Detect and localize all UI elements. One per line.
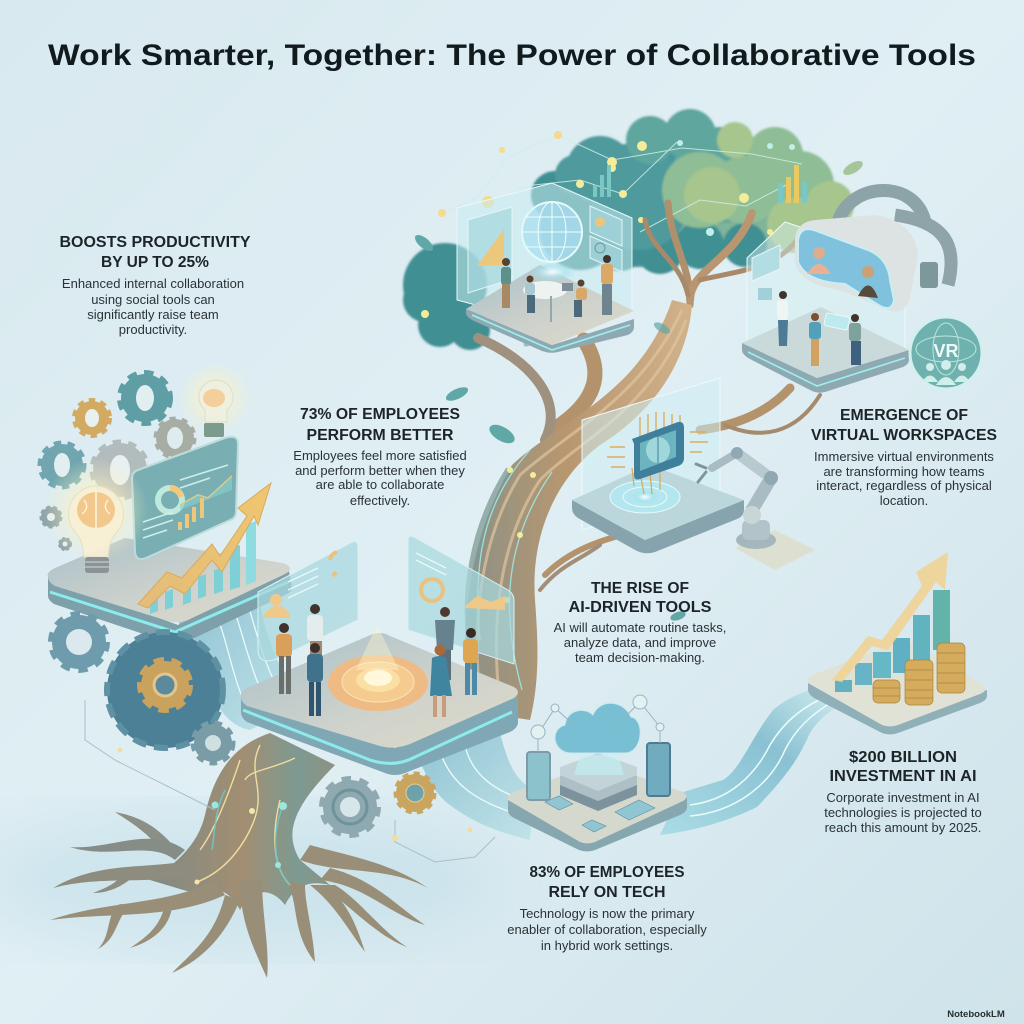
panel: cloud and devices platform: [508, 695, 687, 852]
people: [501, 255, 613, 317]
icon: VR badge: VR: [933, 341, 959, 361]
root detail lines: [197, 745, 295, 885]
gear: left teal: [41, 444, 83, 486]
roots and lower trunk: [50, 733, 428, 978]
gear: gray root: [323, 780, 377, 834]
text: boosts productivity: using social tools can: [91, 292, 215, 307]
text: emergence of virtual workspaces: are transforming how teams: [823, 464, 985, 479]
gears under slab: [52, 615, 232, 762]
side panel: [590, 206, 622, 272]
gear: small: [41, 507, 61, 527]
hologram panel right: [408, 536, 514, 664]
glass backdrop: [457, 183, 632, 325]
text: $200 billion investment: technologies is projected to: [824, 805, 982, 820]
panel: investment platform with coins: [808, 552, 987, 734]
text: $200 billion investment: Corporate investment in AI: [826, 790, 980, 805]
circuit lines: [85, 700, 495, 862]
growth arrow: [832, 552, 948, 682]
text: emergence of virtual workspaces: EMERGENCE OF: [840, 407, 968, 424]
text: emergence of virtual workspaces: Immersive virtual environments: [814, 449, 994, 464]
text: rise of AI-driven tools: AI-DRIVEN TOOLS: [568, 599, 712, 616]
person 3: [307, 643, 323, 716]
gear: gray large: [93, 443, 147, 497]
text: boosts productivity: [60, 234, 251, 337]
icon: large brain bulb: [44, 458, 148, 573]
AI chip: [607, 412, 708, 494]
text: 83% rely on tech: RELY ON TECH: [548, 884, 666, 901]
text: 83% rely on tech: 83% OF EMPLOYEES: [530, 864, 684, 881]
platform slab: [466, 265, 634, 353]
platform: virtual workspace: [742, 190, 982, 393]
glow disc: [328, 625, 428, 711]
text: 73% of employees: are able to collaborate: [316, 477, 444, 492]
panel: left gears and ideas cluster: [41, 362, 292, 644]
people: [777, 291, 861, 366]
text: 73% of employees: and perform better when they: [295, 463, 465, 478]
text: boosts productivity: Enhanced internal collaboration: [62, 276, 244, 291]
cloud links: [538, 702, 660, 752]
person 2: [307, 604, 323, 671]
VR headset: [795, 190, 951, 312]
person 4: [435, 607, 455, 680]
text: 73% of employees: Employees feel more satisfied: [293, 448, 467, 463]
glass wall: [747, 222, 905, 375]
gear: small lower: [194, 724, 232, 762]
text: $200 billion investment: [824, 749, 982, 835]
tree trunk and branches: [465, 203, 820, 720]
flowing data ribbon: [179, 590, 845, 840]
platform: AI chip and robot arm: [572, 378, 815, 570]
gear: blue left: [52, 615, 106, 669]
person 5: [430, 644, 452, 717]
text: rise of AI-driven tools: [554, 580, 726, 665]
text: 73% of employees: effectively.: [350, 493, 410, 508]
tree canopy: [403, 109, 854, 350]
text: rise of AI-driven tools: AI will automate routine tasks,: [554, 620, 726, 635]
gear: gold: [75, 401, 109, 435]
server stack: [560, 753, 637, 811]
person 6: [463, 628, 478, 695]
wall panel: [752, 245, 780, 300]
text: 73% of employees: PERFORM BETTER: [306, 427, 454, 444]
bar chart: [150, 521, 256, 614]
text: boosts productivity: productivity.: [119, 322, 187, 337]
ribbon to investment: [660, 688, 845, 835]
watermark: NotebookLM: [947, 1009, 1005, 1020]
ribbon to cloud: [413, 722, 535, 840]
platform slab: [241, 633, 518, 775]
platform slab: [572, 465, 744, 553]
text: boosts productivity: BOOSTS PRODUCTIVITY: [60, 234, 251, 251]
text: emergence of virtual workspaces: VIRTUAL WORKSPACES: [811, 427, 997, 444]
panel: central team platform: [241, 536, 518, 775]
text: boosts productivity: significantly raise team: [87, 307, 219, 322]
gear: tan: [156, 419, 194, 457]
hologram panel left: [258, 542, 358, 661]
floating leaves: [412, 158, 865, 622]
text: rise of AI-driven tools: analyze data, and improve: [564, 635, 716, 650]
platform slab: [742, 307, 909, 393]
text: rise of AI-driven tools: THE RISE OF: [591, 580, 689, 597]
gear: top teal: [121, 374, 169, 422]
globe: [522, 202, 582, 282]
dashboard screen: [132, 437, 238, 559]
text: $200 billion investment: INVESTMENT IN AI: [830, 768, 976, 785]
phone: [647, 743, 670, 796]
tablet: [527, 752, 550, 800]
platform: team meeting with globe: [457, 183, 634, 353]
coin stacks: [873, 643, 965, 705]
root fingers: [50, 812, 428, 978]
table: [523, 281, 567, 322]
text: 83% rely on tech: [507, 864, 707, 953]
text: rise of AI-driven tools: team decision-making.: [575, 650, 705, 665]
bar chart: [835, 590, 950, 692]
gear: tiny: [59, 538, 71, 550]
canopy network lines and nodes: [440, 135, 802, 232]
gear: big dark: [107, 632, 223, 748]
text: 73% of employees: 73% OF EMPLOYEES: [300, 406, 460, 423]
chart panel: [468, 207, 512, 293]
text: 73% of employees: [293, 406, 467, 508]
text: 83% rely on tech: enabler of collaboration, especially: [507, 922, 707, 937]
text: emergence of virtual workspaces: [811, 407, 997, 508]
text: boosts productivity: BY UP TO 25%: [101, 254, 209, 271]
canopy mini bar chart: [593, 165, 807, 203]
title: Work Smarter, Together: The Power of Collaborative Tools: [48, 39, 976, 72]
glass panels: [582, 378, 720, 530]
text: emergence of virtual workspaces: interact, regardless of physical: [816, 478, 992, 493]
gear: gold root: [396, 774, 434, 812]
gear: gold big: [141, 661, 189, 709]
text: $200 billion investment: reach this amount by 2025.: [825, 820, 981, 835]
icon: small bulb: [179, 362, 251, 437]
text: emergence of virtual workspaces: location.: [880, 493, 928, 508]
platform slab: [48, 538, 292, 644]
text: $200 billion investment: $200 BILLION: [849, 749, 957, 766]
mini tablets on platform: [545, 796, 655, 832]
text: 83% rely on tech: Technology is now the primary: [520, 906, 695, 921]
icon: VR badge: [910, 317, 982, 389]
icon: cloud: [555, 703, 640, 753]
person 1: [276, 623, 292, 694]
text: 83% rely on tech: in hybrid work settings.: [541, 938, 673, 953]
lower gears: [85, 700, 495, 862]
growth arrow: [138, 483, 271, 608]
robot arm: [696, 453, 771, 510]
people: [276, 604, 478, 717]
